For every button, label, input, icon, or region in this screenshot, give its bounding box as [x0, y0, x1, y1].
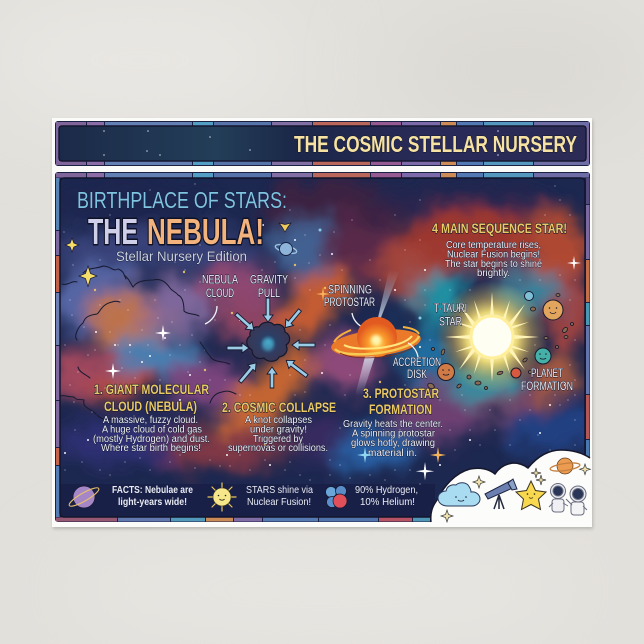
- text: step 4 description: brightly.: [477, 268, 510, 279]
- text: step 3 description: [343, 419, 443, 459]
- label: t-tauri star: STAR: [439, 316, 462, 328]
- label: nebula cloud: [202, 274, 238, 300]
- icon: planets: [438, 292, 563, 380]
- label: spinning protostar: SPINNING: [328, 284, 372, 296]
- pointer: protostar: [352, 313, 362, 327]
- icon: astronauts: [549, 484, 587, 515]
- text: facts stars: Nuclear Fusion!: [247, 496, 311, 508]
- heading: step 3: FORMATION: [369, 401, 432, 417]
- text: step 2 description: [228, 415, 328, 454]
- text: facts nebulae: [112, 484, 193, 508]
- label: gravity pull: [250, 274, 288, 300]
- label: planet formation: PLANET: [531, 368, 563, 380]
- icon: smiling cloud: [438, 483, 480, 506]
- dark facts band: [183, 484, 408, 494]
- heading: the nebula: [88, 211, 264, 252]
- text: step 2 description: A knot collapses: [245, 415, 312, 426]
- text: step 3 description: material in.: [368, 448, 417, 459]
- heading: step 4: 4 MAIN SEQUENCE STAR!: [432, 220, 567, 236]
- text: step 4 description: Core temperature rises,: [446, 240, 541, 251]
- stained glass frame: main: [56, 173, 590, 522]
- text: step 4 description: The star begins to shine: [445, 259, 542, 270]
- icon: smiling star: [516, 481, 546, 510]
- postcard: [52, 118, 593, 529]
- text: facts hydrogen: [355, 484, 418, 508]
- heading: step 2: 2. COSMIC COLLAPSE: [222, 399, 336, 415]
- heading: step 1: 1. GIANT MOLECULAR: [94, 381, 209, 397]
- icon: purple planet: [67, 485, 101, 509]
- icon: ringed orange planet: [550, 458, 580, 474]
- label: gravity pull: GRAVITY: [250, 274, 288, 286]
- pointer: nebula cloud: [205, 306, 217, 324]
- asteroid belt: [427, 294, 574, 390]
- icon: sparkle yellow: [65, 238, 97, 286]
- heading: step 3: 3. PROTOSTAR: [363, 385, 439, 401]
- label: nebula cloud: CLOUD: [206, 288, 234, 300]
- pointer: accretion disk: [408, 343, 418, 357]
- icon: molecule: [326, 486, 347, 508]
- text: facts hydrogen: 10% Helium!: [360, 496, 415, 508]
- sun glow: [436, 281, 548, 393]
- arrows: gravity pulling inward: [227, 298, 315, 388]
- facts strip: [67, 483, 418, 511]
- heading: step 1: [94, 381, 209, 414]
- icon: protostar with disk and jets: [330, 270, 422, 396]
- label: accretion disk: DISK: [407, 369, 427, 381]
- panel: main nebula scene: [30, 172, 597, 522]
- sparkle stars: [105, 256, 581, 480]
- icon: ringed planet: [274, 242, 298, 256]
- text: step 4 description: Nuclear Fusion begins!: [447, 250, 540, 260]
- inner frame line: [60, 178, 585, 517]
- panel: white cloud corner with mascots: [431, 450, 592, 527]
- nebula cloud outlines: [57, 266, 236, 419]
- icon: smiling sun: [208, 483, 236, 511]
- heading: the nebula: THE: [88, 211, 138, 252]
- text: facts nebulae: light-years wide!: [118, 496, 187, 508]
- text: facts hydrogen: 90% Hydrogen,: [355, 484, 418, 496]
- text: step 1 description: A massive, fuzzy cloud.: [103, 415, 198, 426]
- label: spinning protostar: [324, 284, 375, 309]
- icon: telescope: [485, 479, 517, 509]
- label: planet formation: [521, 368, 573, 393]
- panel: header banner: [55, 121, 590, 166]
- icon: small star: [279, 223, 291, 232]
- icon: collapsing gas knot: [247, 322, 290, 361]
- text: facts stars: STARS shine via: [246, 484, 313, 496]
- stained glass frame: header: [56, 122, 589, 165]
- label: spinning protostar: PROTOSTAR: [324, 297, 375, 309]
- text: step 3 description: A spinning protostar: [352, 428, 436, 440]
- text: facts nebulae: FACTS: Nebulae are: [112, 484, 193, 496]
- text: step 1 description: [93, 415, 210, 454]
- icon: main sequence sun: [445, 292, 539, 382]
- nebula background painting: [60, 178, 584, 502]
- label: planet formation: FORMATION: [521, 381, 573, 393]
- text: step 3 description: Gravity heats the center.: [343, 419, 443, 430]
- label: gravity pull: PULL: [258, 288, 280, 300]
- text: step 1 description: Where star birth begins!: [101, 443, 201, 454]
- text: step 3 description: glows hotly, drawing: [351, 438, 435, 449]
- text: step 2 description: supernovas or collisions.: [228, 443, 328, 454]
- label: accretion disk: [393, 357, 441, 381]
- scattered stars: [64, 184, 575, 484]
- label: t-tauri star: [434, 303, 467, 328]
- label: nebula cloud: NEBULA: [202, 274, 238, 286]
- label: accretion disk: ACCRETION: [393, 357, 441, 369]
- subtitle: Stellar Nursery Edition: [116, 248, 247, 264]
- text: step 1 description: A huge cloud of cold gas: [102, 424, 202, 436]
- text: facts stars: [246, 484, 313, 508]
- label: t-tauri star: T-TAURI: [434, 303, 467, 315]
- text: step 2 description: Triggered by: [253, 434, 303, 445]
- text: step 2 description: under gravity!: [250, 424, 307, 436]
- heading: step 3: [363, 385, 439, 417]
- text: step 1 description: (mostly Hydrogen) and dust.: [93, 434, 210, 445]
- heading: step 1: CLOUD (NEBULA): [104, 398, 197, 414]
- text: step 4 description: [445, 240, 542, 279]
- heading: the nebula: NEBULA!: [147, 211, 264, 252]
- heading: birthplace of stars: BIRTHPLACE OF STARS:: [77, 187, 287, 213]
- icon: sparkles: [441, 464, 590, 522]
